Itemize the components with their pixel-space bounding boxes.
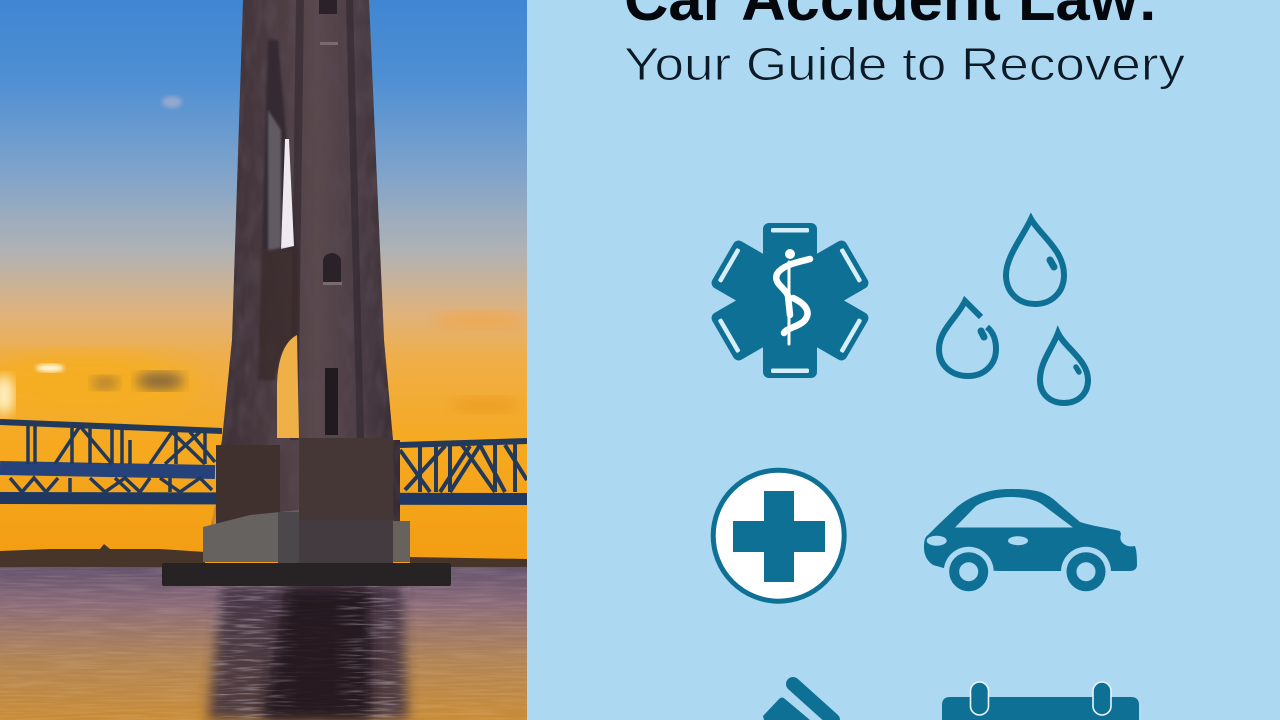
panel: right background: [527, 0, 1280, 720]
bridge truss: [0, 422, 527, 499]
lower window: [325, 368, 338, 435]
rear light and door handle: [927, 536, 947, 546]
clouds: [0, 96, 525, 417]
rod and serpent: [776, 249, 810, 344]
icon: star of life: [709, 223, 871, 378]
tower brick texture: [200, 0, 410, 525]
tower column shading: [290, 0, 364, 440]
arch opening: [277, 335, 299, 438]
sky slit: [268, 110, 281, 252]
icon: car: [924, 489, 1137, 597]
icon: water drops: [939, 219, 1088, 403]
panel: sunset bridge photo: [0, 0, 527, 720]
wheels: [944, 547, 994, 597]
icon: calendar, cropped at bottom edge: [942, 682, 1139, 720]
icon: bandage, cropped at bottom edge: [763, 684, 833, 720]
pier base: [203, 438, 410, 563]
dark patch under slit: [258, 248, 298, 380]
drop highlights: [981, 260, 1079, 372]
reflection: [208, 586, 408, 720]
concrete slab: [162, 563, 451, 586]
upper windows: [319, 0, 337, 14]
car window: [955, 497, 1073, 528]
water: [0, 563, 527, 720]
icon: medical cross in circle: [713, 470, 844, 601]
top drop: [1006, 219, 1064, 304]
tower: [200, 0, 410, 525]
left leg: [216, 445, 280, 520]
distant tree line: [0, 544, 527, 568]
left drop: [939, 301, 996, 376]
subtitle: Your Guide to Recovery: [624, 38, 1185, 90]
right drop: [1040, 333, 1088, 403]
sky: [0, 0, 527, 570]
